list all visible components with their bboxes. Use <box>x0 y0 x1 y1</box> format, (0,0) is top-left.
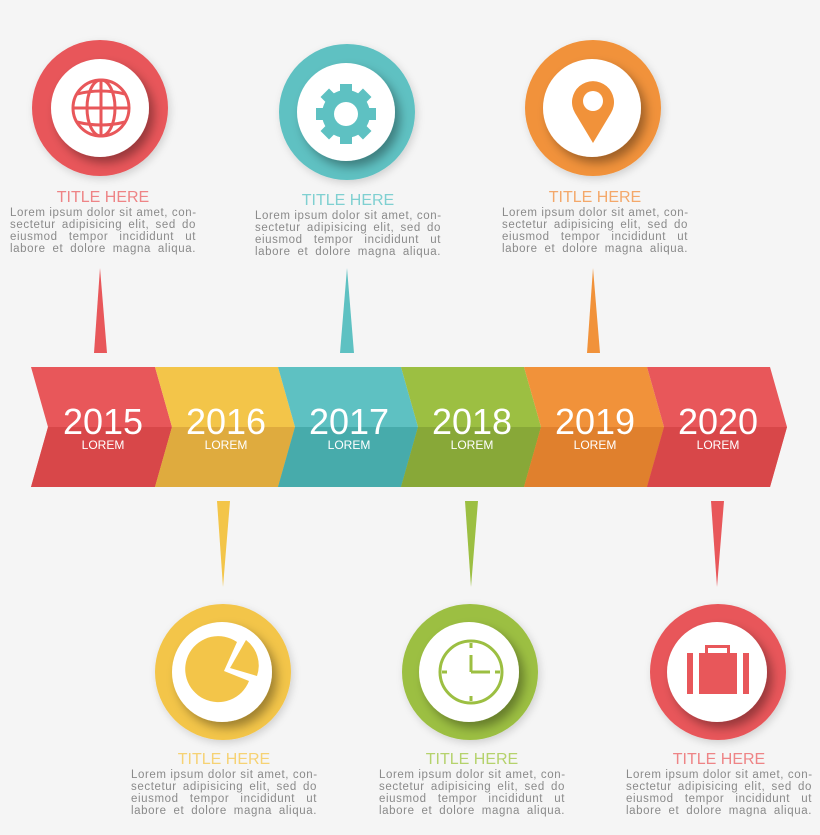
text: 2018 <box>379 751 566 817</box>
text: 2016: sectetur adipisicing elit, sed do <box>131 781 317 793</box>
text: 2020: labore et dolore magna aliqua. <box>626 805 812 817</box>
icon circle: globe <box>32 40 168 176</box>
icon circle: briefcase <box>650 604 786 740</box>
segment 2016: LOREM <box>205 438 247 452</box>
icon circle: map pin <box>525 40 661 176</box>
pointer 2020 <box>711 501 724 587</box>
pointer 2015 <box>94 268 107 353</box>
text: 2019: labore et dolore magna aliqua. <box>502 243 688 255</box>
segment 2020 <box>647 367 787 487</box>
text: 2020: Lorem ipsum dolor sit amet, con- <box>626 769 813 781</box>
text: 2016 <box>131 751 318 817</box>
text: 2018: Lorem ipsum dolor sit amet, con- <box>379 769 566 781</box>
segment 2019: LOREM <box>574 438 616 452</box>
text: 2020 <box>626 751 813 817</box>
text: 2015: Lorem ipsum dolor sit amet, con- <box>10 207 197 219</box>
pointer 2018 <box>465 501 478 587</box>
icon circle: pie chart <box>155 604 291 740</box>
segment 2018 <box>401 367 541 487</box>
segment 2020: 2020 <box>678 401 758 442</box>
icon circle: gear <box>279 44 415 180</box>
segment 2017 <box>278 367 418 487</box>
segment 2016 <box>155 367 295 487</box>
text: 2015 <box>10 189 197 255</box>
segment 2018: 2018 <box>432 401 512 442</box>
text: 2017: labore et dolore magna aliqua. <box>255 246 441 258</box>
text: 2018: sectetur adipisicing elit, sed do <box>379 781 565 793</box>
segment 2017: 2017 <box>309 401 389 442</box>
segment 2016: 2016 <box>186 401 266 442</box>
pointer 2016 <box>217 501 230 587</box>
text: 2016: eiusmod tempor incididunt ut <box>131 793 317 805</box>
timeline bar <box>31 367 787 487</box>
text: 2015: sectetur adipisicing elit, sed do <box>10 219 196 231</box>
segment 2015: LOREM <box>82 438 124 452</box>
segment 2019: 2019 <box>555 401 635 442</box>
pointer 2017 <box>340 268 354 353</box>
text: 2016: Lorem ipsum dolor sit amet, con- <box>131 769 318 781</box>
text: 2018: labore et dolore magna aliqua. <box>379 805 565 817</box>
text: 2017: sectetur adipisicing elit, sed do <box>255 222 441 234</box>
text: 2019: sectetur adipisicing elit, sed do <box>502 219 688 231</box>
text: 2017: eiusmod tempor incididunt ut <box>255 234 441 246</box>
text: 2017: Lorem ipsum dolor sit amet, con- <box>255 210 442 222</box>
text: 2018: eiusmod tempor incididunt ut <box>379 793 565 805</box>
icon circle: clock <box>402 604 538 740</box>
text: 2019: TITLE HERE <box>549 189 641 206</box>
text: 2020: sectetur adipisicing elit, sed do <box>626 781 812 793</box>
segment 2015: 2015 <box>63 401 143 442</box>
segment 2015 <box>31 367 172 487</box>
text: 2015: eiusmod tempor incididunt ut <box>10 231 196 243</box>
segment 2018: LOREM <box>451 438 493 452</box>
text: 2019 <box>502 189 689 255</box>
text: 2017 <box>255 192 442 258</box>
segment 2020: LOREM <box>697 438 739 452</box>
text: 2020: TITLE HERE <box>673 751 765 768</box>
text: 2019: Lorem ipsum dolor sit amet, con- <box>502 207 689 219</box>
text: 2015: TITLE HERE <box>57 189 149 206</box>
text: 2020: eiusmod tempor incididunt ut <box>626 793 812 805</box>
text: 2018: TITLE HERE <box>426 751 518 768</box>
segment 2017: LOREM <box>328 438 370 452</box>
segment 2019 <box>524 367 664 487</box>
pointer 2019 <box>587 268 600 353</box>
text: 2015: labore et dolore magna aliqua. <box>10 243 196 255</box>
text: 2017: TITLE HERE <box>302 192 394 209</box>
text: 2016: labore et dolore magna aliqua. <box>131 805 317 817</box>
text: 2016: TITLE HERE <box>178 751 270 768</box>
text: 2019: eiusmod tempor incididunt ut <box>502 231 688 243</box>
